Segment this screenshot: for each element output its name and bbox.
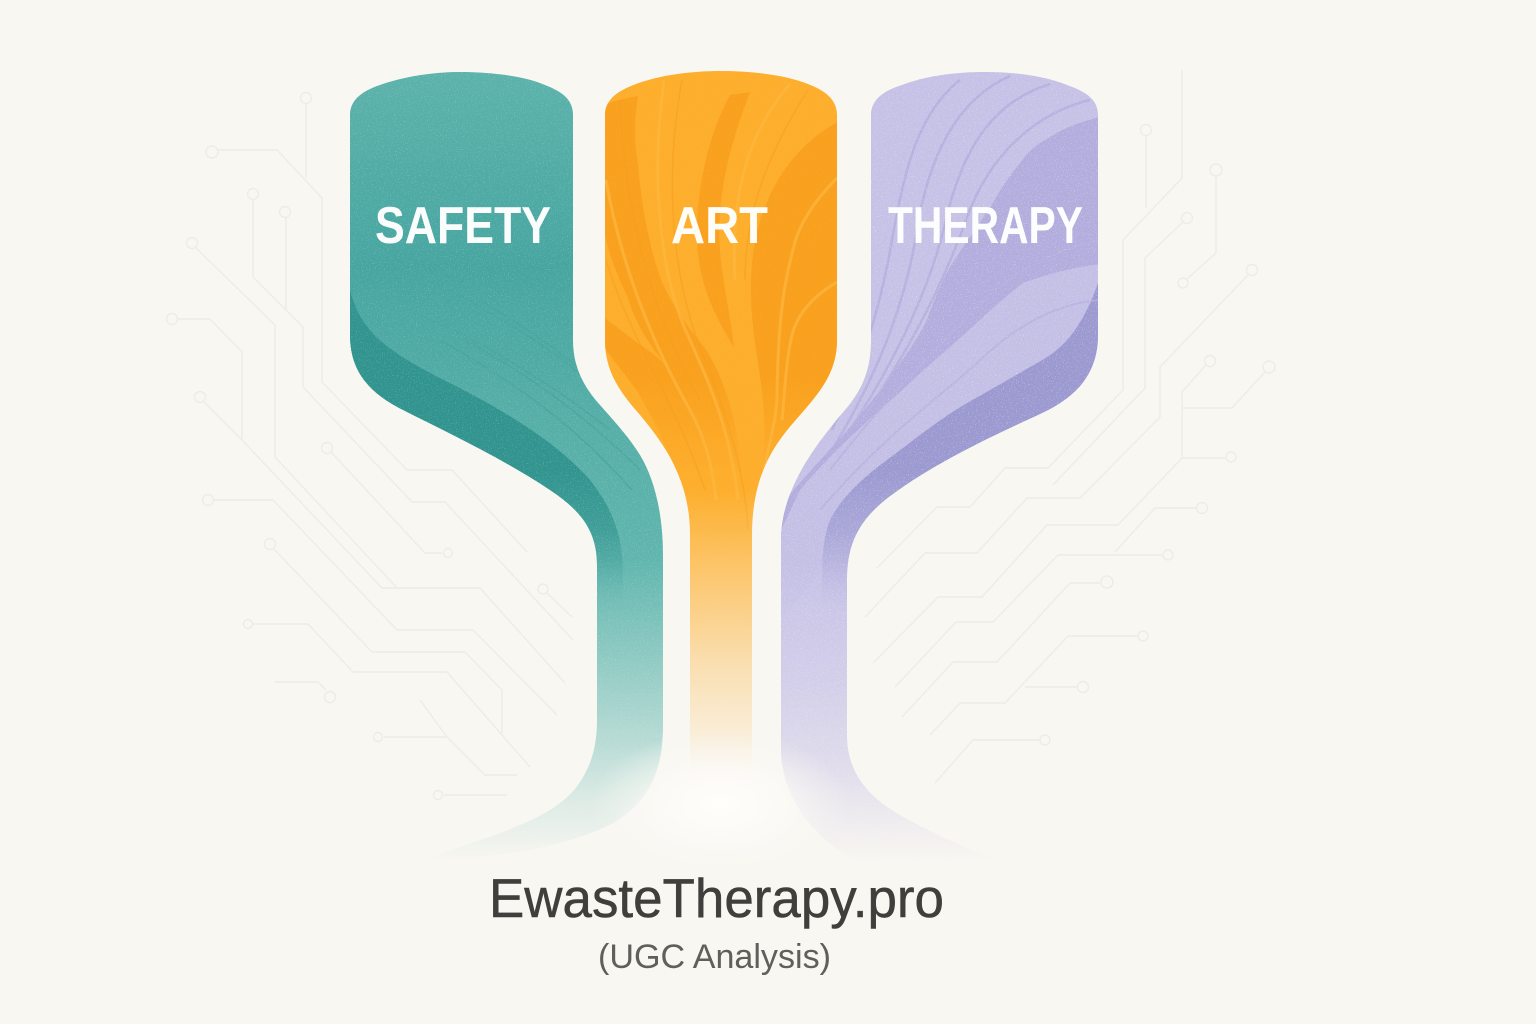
darker lower band xyxy=(350,290,623,576)
panel: safety funnel xyxy=(350,72,663,844)
subtitle: (UGC Analysis) xyxy=(598,938,831,976)
darker lower band xyxy=(822,284,1098,579)
panel: art funnel xyxy=(605,71,837,756)
title: EwasteTherapy.pro xyxy=(489,867,944,929)
label: safety: SAFETY xyxy=(375,197,551,255)
flowing tonal layers xyxy=(780,117,1100,540)
circuit traces: left xyxy=(166,92,573,800)
glow at convergence point xyxy=(590,730,850,880)
circuit traces: right xyxy=(865,70,1275,783)
panel: therapy funnel xyxy=(781,72,1098,830)
label: art: ART xyxy=(671,197,768,255)
label: therapy: THERAPY xyxy=(888,197,1083,255)
wood grain bands xyxy=(600,92,845,480)
